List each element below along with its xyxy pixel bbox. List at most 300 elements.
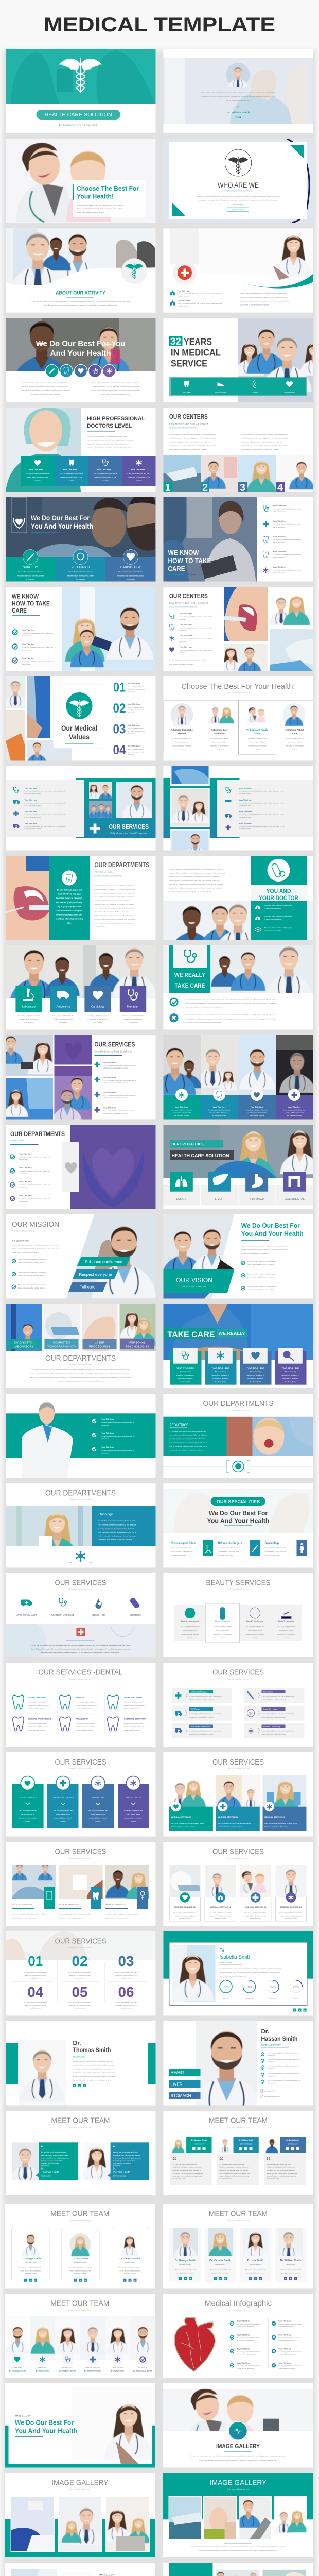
two paragraphs: opportunity can be with us interactive marketing plan. It's now that (241, 445, 288, 447)
number text: reader will be distracted by the (69, 2004, 91, 2006)
dental body text: It is a long established fact (28, 1722, 47, 1724)
card text: distracted by the readable (19, 1817, 37, 1819)
tags: Helicopter Ambulance (190, 1725, 211, 1728)
ring values (223, 1986, 299, 1989)
slide: you and your doctor (164, 856, 313, 940)
bio (219, 1968, 281, 1977)
teal features (251, 901, 307, 940)
check column: It is a long established fact that a (237, 2337, 260, 2339)
card text: reader will be distracted by the (209, 1914, 232, 1917)
footer text: Your Title Here (212, 1106, 226, 1108)
value text: fact that a reader will be (128, 688, 145, 690)
two paragraphs: thanks to company! Our tool will guide you step by step to get your (169, 437, 216, 439)
number text: reader will be distracted by the (69, 1974, 91, 1976)
photo: male doctor (10, 2142, 40, 2181)
quote marks: “ (219, 2156, 223, 2166)
heading: MEET OUR TEAM (51, 2116, 110, 2125)
check list: be distracted (22, 649, 31, 651)
bios: passages of lorem ipsum . (281, 2272, 300, 2274)
bios: There are many variations of (280, 2269, 301, 2271)
footer text: It is a long established fact that (246, 1109, 268, 1111)
slide: testimonial (164, 49, 313, 133)
body text: done. Evaluate how successful your new business opportunity can be with us interactive marketing plan. (44, 304, 117, 306)
card titles: Method (178, 732, 186, 735)
check list: distracted . (268, 2067, 275, 2070)
column labels (29, 468, 145, 471)
dental body text: by the readable content (28, 1729, 45, 1731)
tile text: It is a long established fact that (122, 1015, 144, 1017)
doctor cutout (22, 1402, 73, 1478)
photo labels: PROCEDURES (89, 1346, 110, 1349)
speciality: GYNECOLOGY (219, 1962, 233, 1964)
check list (261, 2052, 301, 2084)
heading: OUR DEPARTMENTS (45, 1354, 116, 1363)
list text: Your Title Here (239, 811, 252, 813)
service labels: Facelift Contouring (246, 1620, 263, 1622)
department labels: PEDIATRICS (72, 566, 90, 569)
names: Dr. George Smith (9, 2370, 26, 2372)
body text: your new business opportunity can be with us interactive (94, 922, 134, 924)
card text: reader will be distracted by the (280, 1914, 302, 1917)
card text: It is a long established fact that a reader will be (59, 1913, 92, 1916)
numbered values: 02 (113, 701, 126, 716)
bios (19, 2267, 141, 2274)
body text: and more effective to start your business, thanks, It's now (94, 907, 135, 909)
numbers (27, 1953, 134, 2000)
feature list: readable content (177, 304, 189, 307)
teal quote card: NEUROLOGY (41, 2175, 51, 2177)
check column: Your Title Here (237, 2348, 250, 2350)
body: done. Evaluate how successful your new business opportunity can be with us interactive marketing plan, It's now that much easier and more (31, 1372, 130, 1375)
body text: effective to start your business. It's now that much easier (94, 904, 134, 906)
body text (197, 195, 280, 205)
body text: marketing plan. (94, 926, 105, 928)
heading (36, 340, 126, 358)
subheading: Enter your subhead line here (69, 1947, 92, 1949)
card labels: OPERATION THEATER (52, 1796, 74, 1799)
plus list: It is a long established fact that a reader will be (103, 1064, 137, 1066)
teal side bars (6, 2043, 155, 2084)
ring labels (222, 1998, 299, 2000)
dental body text: It is a long established fact (124, 1722, 143, 1724)
pill: OUR SPECIALITIES (217, 1499, 260, 1505)
body (30, 1368, 131, 1382)
card text: but the majority (285, 1381, 296, 1383)
photo labels: PSYCHOLOGIST (126, 1346, 149, 1349)
value text: It is a long established (128, 706, 144, 708)
service list (13, 787, 65, 829)
doctor name: Hassan Smith (261, 2036, 297, 2042)
slide: 32 years in medical service (164, 318, 313, 402)
check list: There are many variations of passages of (18, 1272, 47, 1274)
roles: CARDIOLOGY (12, 2367, 23, 2369)
check column: It is a long established fact that a (237, 2365, 260, 2367)
body: It's now that much easier and more effective to start your business, thanks to company! Our tool will guide you step by step to get your project (31, 1644, 130, 1646)
subheading: Enter your subhead line here (227, 1588, 250, 1590)
value text: distracted (128, 711, 135, 714)
value text: It is a long established (128, 686, 144, 688)
heading: CARE (168, 565, 185, 573)
heading: MEET OUR TEAM (50, 2210, 109, 2218)
card text: that a reader will be (127, 1813, 140, 1815)
faded photo (164, 58, 313, 124)
tag (170, 1140, 223, 1148)
specialities columns: move forward. It may be at the (171, 1551, 192, 1553)
organ tiles (170, 1172, 306, 1192)
blue text box: easier and more effective to start your business. (99, 1538, 132, 1540)
two body columns: can be with us interactive marketing plan. (31, 393, 60, 395)
organ labels: STOMACH (250, 1198, 264, 1201)
slide: doctor Thomas Smith profile (6, 2021, 155, 2106)
numbers: 06 (118, 1984, 134, 2000)
number text: readable content (74, 1977, 86, 1979)
subheading: Enter your subhead line here (227, 2126, 250, 2128)
footer text: It is a long established fact that (171, 1109, 192, 1111)
doctor name: Dr. (73, 2040, 81, 2047)
number text: It is a long established fact that a (114, 1971, 138, 1973)
heading: IMAGE GALLERY (210, 2479, 267, 2487)
slide: meet our team three cards (164, 2111, 313, 2195)
slide: meet our team bracket cards (5, 2204, 155, 2289)
description: It's now that much easier and more effective to start your business, (12, 1244, 59, 1246)
framed photos (10, 2497, 150, 2552)
subheading: Enter your subhead line here (69, 2309, 91, 2311)
teal features: of lorem ipsum available. (264, 918, 282, 920)
two body columns: It's now that much easier and more effective to start your business, (22, 382, 69, 384)
four photos (6, 1304, 156, 1351)
names: Dr. Victoria Smith (209, 2259, 231, 2262)
ring values: 50% (270, 1986, 276, 1989)
organ labels: LUNGS (176, 1198, 187, 1201)
two paragraphs: project done. Evaluate how successful your new business (241, 441, 282, 443)
check list: It is a long established fact that a reader will (22, 660, 53, 663)
years heading: 32 (170, 336, 181, 347)
card labels (174, 1906, 302, 1908)
cross column: reader will be distracted . (278, 2326, 296, 2328)
slide: image gallery, teal header (163, 2473, 313, 2557)
card text: distracted by the readable (54, 1817, 73, 1819)
bios (175, 2269, 301, 2274)
colored name tags: Dr. Margaret Smith (191, 2139, 207, 2141)
check list: lorem ipsum available, but the majority . (247, 1276, 275, 1278)
slide: about our activity (6, 228, 155, 313)
start button: START NOW (232, 209, 244, 211)
service text: by the readable content (24, 816, 41, 818)
service labels: Pharmacy (129, 1614, 141, 1617)
check list: be distracted (19, 1187, 28, 1189)
body text: your new business opportunity can be with us interactive (94, 896, 134, 898)
check list: lorem ipsum available, but the majority. (18, 1261, 46, 1263)
icons and labels: Fitness Program (215, 391, 227, 393)
dental body text: that a reader will be distracted (76, 1704, 97, 1706)
feature list: Your Title Here (177, 290, 190, 292)
photo: child at dentist (226, 1417, 314, 1457)
bio: new business opportunity can be . It's now that much easier (73, 2072, 115, 2074)
quote text: It's now that much (219, 2178, 233, 2180)
card text: It is a long established fact that a reader will be (105, 1913, 138, 1916)
check list: It is a long established fact that a reader will be (101, 1450, 135, 1452)
description: project done. Evaluate how successful (12, 1251, 39, 1253)
specialities columns: No company can afford not to (171, 1547, 192, 1549)
service text: that a reader will be (183, 1629, 197, 1631)
plus list: It is a long established fact that a reader will be (103, 1094, 137, 1096)
service text: that a reader will be (248, 1629, 262, 1631)
slide: choose the best projects (163, 2563, 313, 2576)
icon: stethoscope panel (173, 945, 207, 968)
department tabs (169, 2069, 201, 2099)
footer text: a reader will be distracted to (285, 1112, 305, 1114)
quote text: It's now that much easier and more (173, 2163, 198, 2165)
years heading (169, 336, 221, 369)
bio (73, 2060, 116, 2081)
check column: Your Title Here (237, 2362, 250, 2364)
check item: much easier and more effective to start your business. (185, 1006, 223, 1008)
card text: variations of passages of (246, 1374, 264, 1376)
slide: we really take care (164, 945, 313, 1029)
heading (61, 724, 97, 741)
two body columns: can be with us interactive marketing plan. (101, 393, 131, 395)
subheading: Enter your subhead line here (227, 1409, 250, 1411)
card labels: MEDICAL SERVICE 04 (280, 1906, 302, 1908)
cross column: Your Title Here (278, 2348, 291, 2350)
body: to get your project done. Evaluate how successful your new (87, 443, 129, 445)
framed photos (169, 2496, 307, 2540)
icon list: distracted . (179, 652, 187, 654)
number text: readable content (120, 1977, 132, 1979)
bios: There are many variations of (245, 2269, 265, 2271)
card text: YOUR TITLE HERE (246, 1367, 264, 1369)
subheading: Enter your subhead line here (227, 691, 250, 693)
photo: nurse (72, 2387, 153, 2464)
roles: ONCOLOGY (286, 2263, 295, 2265)
names (21, 2257, 140, 2260)
heading: OUR SERVICES (55, 1848, 106, 1856)
footer text: It is a long established fact that a reader will be (218, 1822, 251, 1824)
check list: There are many variations of passages of (247, 1273, 277, 1275)
heading: OUR CENTERS (169, 413, 208, 420)
subheading: Enter your subhead line here (69, 1768, 92, 1770)
names: Dr. Isla Smith (111, 2370, 125, 2372)
card titles: Pediatric And Family (246, 728, 268, 731)
slide: our centers with numbered photos (164, 408, 313, 494)
roles: CARDIOLOGY (215, 2263, 225, 2265)
icons and labels: Cardio Division (284, 391, 295, 393)
right paragraph: thanks to company! Our tool will guide you step by step to get your (240, 296, 287, 298)
card text: It is a long established fact that a reader will be (189, 1695, 223, 1697)
tag: OUR SPECIALITIES (172, 1142, 204, 1146)
tile text: a reader will be distracted by (19, 1018, 39, 1020)
check column: It is a long established fact that a (237, 2323, 260, 2325)
body text: It's now that much easier and more effective to start your (94, 885, 134, 887)
slide: meet our team two quotes (6, 2111, 155, 2195)
card text: content (255, 749, 260, 751)
column text: reader will be distracted by the (128, 476, 150, 478)
service text: It is a long established fact (213, 1625, 232, 1628)
specialities columns: Gynecology (264, 1541, 279, 1545)
panel heading line two: Your Health! (77, 193, 114, 200)
card text: It is a long established fact that a reader will be (189, 1713, 223, 1715)
heading: OUR SERVICES (55, 1758, 106, 1767)
heading: HOW TO TAKE (168, 556, 211, 565)
quote marks (172, 2156, 271, 2166)
slide: our departments, dental clinic (6, 856, 155, 940)
service text: It is a long established fact that a reader will be distracted (24, 802, 65, 804)
card text: variations of passages of (211, 1374, 229, 1376)
icon list: distracted . (179, 640, 187, 642)
dental body text: by the readable content (124, 1729, 140, 1731)
icon: caring hands (13, 518, 25, 528)
body: business, thanks to company! Our tool will guide you step by step (87, 439, 133, 441)
photo labels: PERSONAL (129, 1342, 146, 1345)
white card (169, 1942, 307, 2006)
purple photo panel (70, 1125, 155, 1209)
card text: distracted by the readable content (105, 1917, 129, 1919)
list text: readable content (239, 804, 251, 806)
card text: reader will be distracted by the (245, 1914, 267, 1917)
card text: distracted by the readable content (261, 1733, 286, 1735)
body text: business, thanks to company! Our tool will guide you step (94, 914, 135, 917)
card text: There are many (250, 1371, 261, 1373)
right paragraph: It's now that much easier and more effective to start your business, (240, 292, 287, 294)
tile text: the readable (24, 1021, 33, 1023)
roles: ORTHOPAEDICS (112, 2367, 123, 2369)
heading: DOCTORS LEVEL (87, 423, 132, 429)
department tabs: HEART (171, 2070, 185, 2075)
check list: Your Title Here (22, 629, 35, 631)
roles: CARDIOLOGY (125, 2262, 135, 2264)
body (241, 1245, 288, 1255)
plus list: distracted by the readable content (103, 1097, 128, 1099)
photo: purple therapy (55, 1066, 92, 1119)
check list: be distracted (19, 1158, 28, 1160)
icon list (225, 787, 285, 830)
heading: You And Your Health (31, 522, 93, 530)
roles (180, 2263, 295, 2265)
subheading: Enter your subhead line here (227, 1857, 250, 1859)
check list: It is a long established fact that a reader will be (268, 2072, 301, 2074)
slide: our services four colored cards (6, 1752, 155, 1836)
department tabs: LIVER (171, 2082, 183, 2087)
check column: Your Title Here (237, 2334, 250, 2336)
body text: how successful your new business opportunity can be with us interactive (169, 876, 220, 878)
teal frame (5, 2426, 155, 2468)
service text: It is a long established fact (181, 1625, 200, 1628)
colored name tags (186, 2137, 306, 2153)
photo labels: LABORATORY (14, 1346, 34, 1349)
numbers: 02 (72, 1953, 87, 1969)
icon tiles (173, 1348, 303, 1364)
slanted tabs (68, 1257, 131, 1292)
blue text box: you step by step to get your project done. Evaluate (99, 1528, 134, 1530)
body text: marketing plan. It's now that much easier and more effective to start your (169, 879, 220, 882)
check list: Your Title Here (22, 657, 35, 659)
teal base (5, 2519, 155, 2557)
feature list: It is a long established fact that a reader will be distracted by the (177, 293, 223, 295)
numbered values (113, 680, 126, 757)
heading: Values (69, 733, 90, 741)
heading: OUR SERVICES (55, 1937, 106, 1945)
heading: ABOUT OUR ACTIVITY (56, 290, 105, 296)
column labels: Your Title Here (131, 468, 145, 471)
black accent (217, 1260, 235, 1269)
list text: Your Title Here (273, 520, 286, 522)
check list: Your Title Here (101, 1432, 114, 1434)
card text: that a reader will be (250, 741, 264, 743)
accent line (168, 574, 196, 575)
list text: It is a long established fact that a reader will be distracted by the (239, 802, 285, 804)
card text: It is a long established fact that a reader will be (261, 1695, 295, 1697)
heading: OUR CENTERS (169, 592, 208, 600)
photo: dental (224, 587, 268, 641)
footer text: distracted by the readable content (264, 1826, 288, 1828)
specialities columns: move forward. It may be at the (218, 1551, 240, 1553)
icons and labels: Oral Health (183, 391, 191, 393)
number text: It is a long established fact that a (114, 2001, 138, 2003)
check list: It is a long established fact that a reader will be (268, 2065, 301, 2067)
subheading: Enter your subhead line here (227, 2488, 250, 2490)
plus list: Your Title Here (103, 1077, 116, 1079)
card chevrons (26, 1803, 136, 1805)
body text: thanks to company! Our tool will guide you step by step to get (169, 891, 212, 893)
names: Dr. Alexander Smith (133, 2370, 152, 2372)
description: thanks to company! Our tool will guide you step by step to get your (12, 1248, 59, 1250)
photo: typing (11, 2569, 58, 2576)
tile text: a reader will be distracted by (53, 1018, 74, 1020)
icon: caduceus in circle (121, 258, 147, 284)
number tiles: 4 (277, 482, 283, 494)
check list: distracted . (268, 2061, 275, 2063)
photo: man in blue scrubs (164, 1304, 314, 1360)
card text: lorem ipsum available, (178, 1378, 193, 1380)
list text: It is a long established fact that a reader will be distracted by the (239, 814, 285, 816)
service labels (16, 1614, 141, 1617)
blue text box: Oncology (99, 1513, 113, 1516)
card labels: MEDICAL SERVICE 03 (245, 1906, 267, 1908)
slide: four service tiles (6, 945, 155, 1029)
cross column: It is a long established fact that a (278, 2351, 302, 2353)
two paragraphs: opportunity can be with us interactive marketing plan. It's now that (169, 445, 216, 447)
check list: It is a long established fact that a reader will be (268, 2052, 301, 2054)
department text: It's now that much easier and more (118, 571, 143, 573)
check column: reader will be distracted . (237, 2339, 255, 2341)
heading (31, 514, 93, 530)
card icon circles (21, 1776, 140, 1790)
heading panel: YOUR DOCTOR (259, 894, 298, 902)
icon: pill circle (268, 859, 290, 882)
list text: It is a long established fact that a reader will be distracted by the (239, 825, 285, 827)
heading: BEAUTY SERVICES (206, 1579, 271, 1587)
check list: distracted . (268, 2075, 275, 2077)
card text: It is a long established fact (19, 1809, 37, 1811)
card text: It is a long established fact (54, 1809, 73, 1811)
check list: Your Title Here (19, 1195, 32, 1197)
dental body text: It is a long established fact (76, 1701, 95, 1703)
card text (12, 1913, 138, 1919)
slide: our services with red cross (6, 1573, 155, 1657)
quote text: effective to start your business, thanks to (267, 2166, 295, 2168)
body: It's now that much easier and more effective to start your business, thanks to company! Our tool will guide you step by step to get your project (31, 1368, 130, 1370)
teal text box: you step by step to get your project done. Evaluate (170, 1438, 205, 1440)
roles (12, 2367, 147, 2369)
footer text: the readable content (174, 1115, 189, 1117)
slide: cardio clinic purple (6, 1125, 155, 1209)
feature list: Your Title Here (177, 300, 190, 302)
service text: content (187, 1637, 193, 1639)
card text: readable content (285, 1918, 297, 1920)
slide: pediatrics department (164, 1394, 314, 1478)
icon: caduceus (59, 58, 102, 93)
bracket outlines (11, 2229, 149, 2280)
